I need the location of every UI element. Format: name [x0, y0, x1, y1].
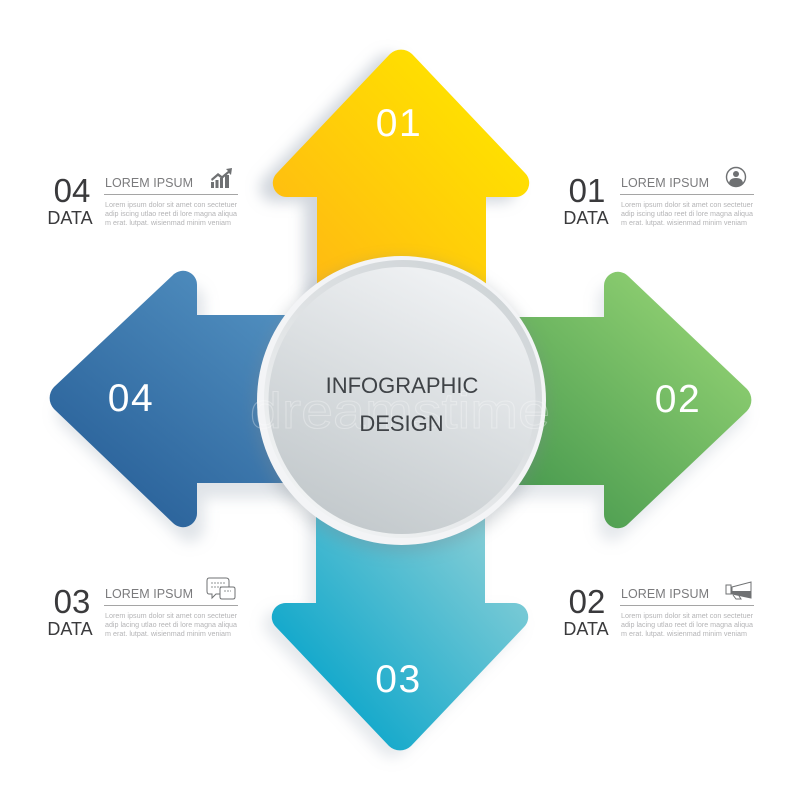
center circle: [250, 256, 550, 552]
info block 04: LOREM IPSUM: [105, 176, 193, 190]
icon: person: [726, 168, 746, 186]
info block 01: LOREM IPSUM: [621, 176, 709, 190]
info block 03: DATA: [47, 619, 93, 639]
icon: megaphone: [726, 582, 751, 599]
info block 04: adip iscing utlao reet di lore magna aliqua: [105, 211, 237, 218]
info block 02: m erat. lutpat. wisienmad minim veniam: [621, 631, 747, 638]
info block 03: 03: [54, 583, 90, 620]
center title: INFOGRAPHIC: [326, 373, 478, 398]
info block 04: Lorem ipsum dolor sit amet con sectetuer: [105, 202, 238, 209]
info block 01: m erat. lutpat. wisienmad minim veniam: [621, 220, 747, 227]
arrow 04: blue left: [50, 271, 295, 527]
info block 03: LOREM IPSUM: [105, 587, 193, 601]
info block 02: DATA: [563, 619, 609, 639]
arrow 02: green right: [505, 272, 751, 528]
center title: DESIGN: [359, 411, 444, 436]
number 02: 02: [655, 378, 701, 421]
info block 03: [47, 578, 238, 639]
number 04: 04: [108, 377, 154, 420]
info block 02: 02: [569, 583, 605, 620]
info block 01: DATA: [563, 208, 609, 228]
info block 03: Lorem ipsum dolor sit amet con sectetuer: [105, 613, 238, 620]
info block 04: [47, 168, 238, 228]
info block 01: 01: [569, 172, 605, 209]
info block 02: adip lacing utlao reet di lore magna aliqua: [621, 622, 753, 629]
info block 02: LOREM IPSUM: [621, 587, 709, 601]
info block 02: [563, 582, 754, 639]
info block 01: [563, 168, 754, 228]
info block 01: adip iscing utlao reet di lore magna aliqua: [621, 211, 753, 218]
info block 01: Lorem ipsum dolor sit amet con sectetuer: [621, 202, 754, 209]
number 01: 01: [376, 102, 422, 145]
arrow shadows: [57, 55, 745, 757]
info block 04: DATA: [47, 208, 93, 228]
arrow 01: yellow up: [273, 50, 529, 295]
info block 04: 04: [54, 172, 90, 209]
number 03: 03: [375, 658, 422, 701]
arrow 03: teal down: [272, 505, 528, 750]
info block 04: m erat. lutpat. wisienmad minim veniam: [105, 220, 231, 227]
watermark: dreamstime: [250, 383, 550, 439]
center title: [326, 373, 478, 436]
info block 02: Lorem ipsum dolor sit amet con sectetuer: [621, 613, 754, 620]
info block 03: m erat. lutpat. wisienmad minim veniam: [105, 631, 231, 638]
info block 03: adip lacing utlao reet di lore magna aliqua: [105, 622, 237, 629]
icon: speech bubbles: [207, 578, 235, 599]
icon: chart: [211, 168, 232, 188]
